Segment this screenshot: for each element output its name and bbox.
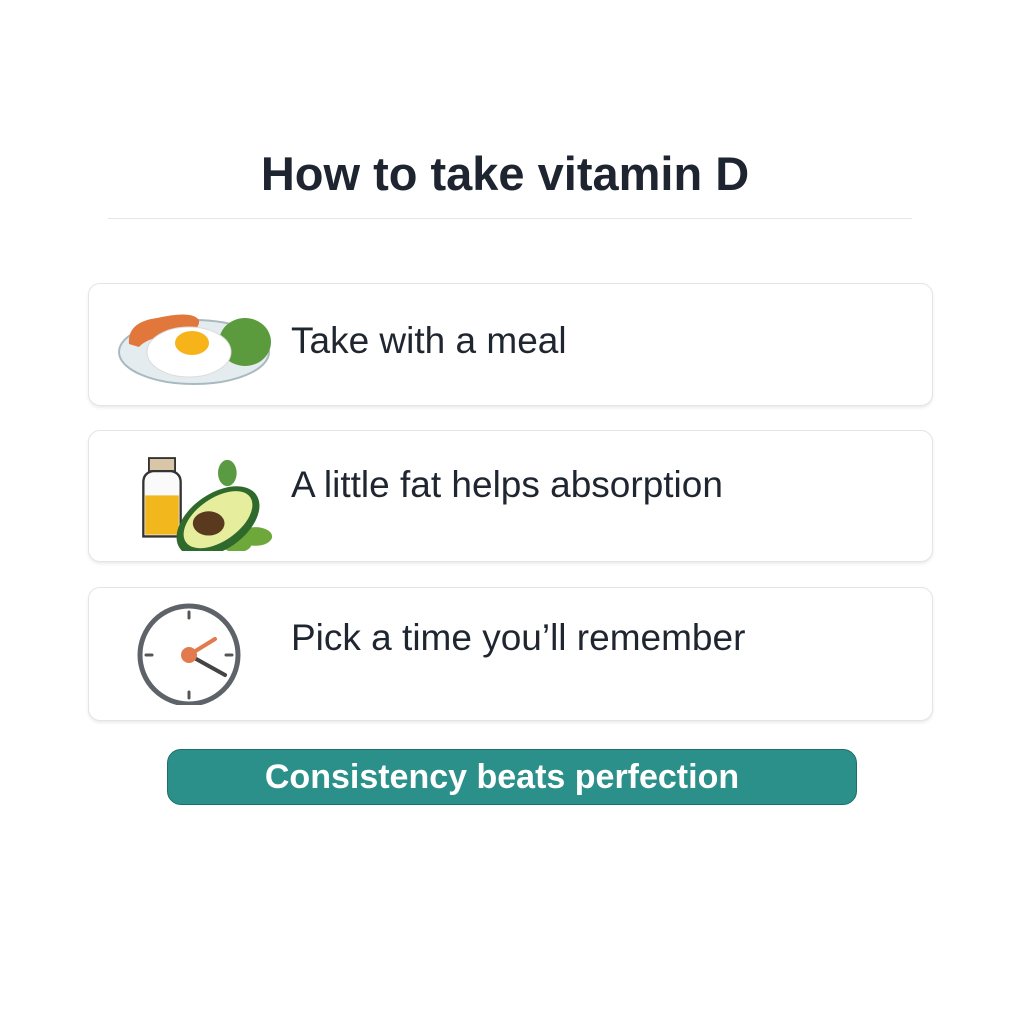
banner [167,749,857,805]
card: time [88,587,933,721]
banner: Consistency beats perfection [265,758,739,796]
text: Pick a time you’ll remember [291,617,745,658]
title: How to take vitamin D [261,147,749,200]
card: meal [88,283,933,406]
icon: clock [138,604,240,705]
icon: oil and avocado [142,457,272,551]
text: A little fat helps absorption [291,464,723,505]
card: fat [88,430,933,562]
icon: plate [118,314,271,385]
text: Take with a meal [291,320,567,361]
